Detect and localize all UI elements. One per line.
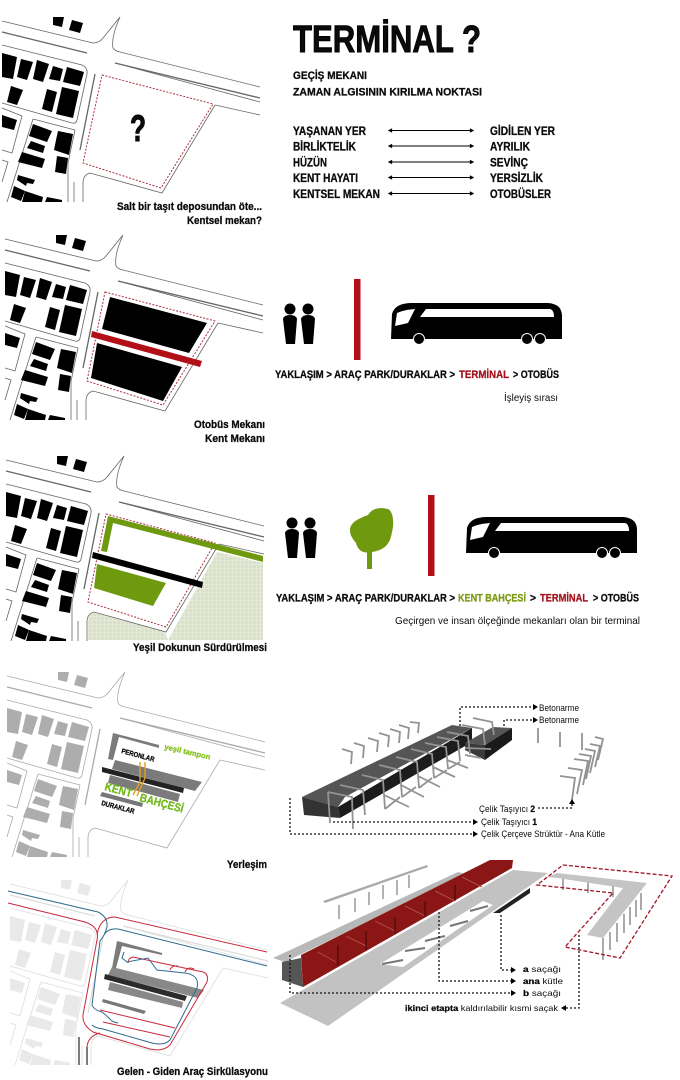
labels: ikinci etapta kaldırılabilir kısmi saçak <box>405 1003 559 1013</box>
labels: Betonarme <box>539 715 579 725</box>
labels <box>405 964 563 1013</box>
building blocks <box>10 880 92 1065</box>
caption: yeşil dokunun: Yeşil Dokunun Sürdürülmesi <box>133 642 267 654</box>
panel: green texture plan <box>6 456 264 641</box>
black mass upper <box>102 297 207 353</box>
dark end wall <box>282 958 303 987</box>
building blocks <box>6 456 88 641</box>
roads <box>6 456 264 641</box>
rear canopy <box>323 865 428 919</box>
platform L shape <box>112 941 162 968</box>
label: duraklar: DURAKLAR <box>100 800 135 816</box>
icon: tree <box>350 508 393 569</box>
caption: yerleşim: Yerleşim <box>227 859 267 871</box>
opposites list <box>293 125 556 201</box>
icon: two people <box>285 518 317 558</box>
left column: YAŞANAN YER <box>293 126 367 138</box>
roads <box>7 672 265 857</box>
right column: SEVİNÇ <box>490 156 528 170</box>
concrete block <box>465 727 512 760</box>
steel portal frames <box>328 718 494 829</box>
terminal band <box>112 760 202 791</box>
leader lines <box>290 912 579 1008</box>
note: geçirgen: Geçirgen ve insan ölçeğinde mekanları olan bir terminal <box>395 615 640 627</box>
title: TERMİNAL ? <box>293 19 481 61</box>
subtitle <box>293 69 482 98</box>
note: işleyiş sırası: İşleyiş sırası <box>504 391 558 404</box>
label: yeşil tampon: yeşil tampon <box>164 742 212 762</box>
building blocks <box>2 17 84 202</box>
left column: BİRLİKTELİK <box>293 140 357 154</box>
icon: bus <box>466 517 637 558</box>
main roof strip <box>273 872 466 962</box>
labels: a saçağı <box>523 964 561 974</box>
second band <box>108 982 183 1008</box>
question mark: ? <box>130 108 146 149</box>
building blocks <box>5 235 87 420</box>
building blocks <box>7 672 89 857</box>
left column <box>293 126 380 201</box>
green texture field <box>88 552 263 640</box>
label: peronlar: PERONLAR <box>120 748 155 764</box>
right column <box>490 125 556 201</box>
label: kent: KENT <box>103 781 133 800</box>
site boundary <box>83 75 213 188</box>
caption: salt bir taşıt <box>117 201 262 227</box>
labels: b saçağı <box>523 988 561 998</box>
sequence text <box>275 368 559 381</box>
sequence text <box>276 592 639 604</box>
labels: Betonarme <box>539 703 579 713</box>
subtitle: GEÇİŞ MEKANI <box>293 69 367 82</box>
bus stops strip <box>102 999 146 1014</box>
sequence text: > OTOBÜS <box>593 592 639 604</box>
main mass end face <box>302 797 340 818</box>
second band <box>108 775 180 802</box>
main mass top face <box>302 725 472 807</box>
labels: Çelik Taşıyıcı 1 <box>481 817 537 827</box>
sequence text: YAKLAŞIM > ARAÇ PARK/DURAKLAR > <box>275 369 455 381</box>
site boundary <box>88 514 215 627</box>
terminal band <box>108 967 204 998</box>
removable U canopy <box>547 873 647 960</box>
arrowheads <box>511 967 566 1011</box>
left column: HÜZÜN <box>293 156 327 170</box>
red terminal divider <box>354 279 360 360</box>
platform L shape <box>108 733 159 760</box>
dark road edges <box>79 1037 87 1065</box>
labels: Çelik Taşıyıcı 2 <box>479 804 535 814</box>
arrows <box>388 128 474 196</box>
labels: ana kütle <box>523 976 563 986</box>
left column: KENTSEL MEKAN <box>293 189 380 201</box>
caption: otobüs mekanı <box>194 419 265 445</box>
green buffer strip <box>101 516 263 562</box>
sequence text: KENT BAHÇESİ <box>458 592 526 604</box>
orange walkways <box>133 762 145 796</box>
labels: Çelik Çerçeve Strüktür - Ana Kütle <box>481 829 605 839</box>
caption: otobüs mekanı: Kent Mekanı <box>205 433 265 445</box>
sequence text: > <box>530 592 536 604</box>
black mass lower <box>91 343 182 401</box>
bus stops strip <box>100 792 143 807</box>
panel: site plan with question mark <box>2 17 260 202</box>
sequence text: YAKLAŞIM > ARAÇ PARK/DURAKLAR > <box>276 592 455 604</box>
arrowheads <box>473 704 575 837</box>
main mass side face <box>338 728 472 818</box>
icon: bus <box>391 303 562 344</box>
roads <box>2 17 260 202</box>
panel: circulation plan <box>8 880 268 1065</box>
rear bare frames <box>342 722 419 764</box>
roads <box>10 880 268 1065</box>
panel: bus and city space plan <box>5 235 263 420</box>
red terminal divider <box>428 495 434 576</box>
front slab <box>280 870 548 1026</box>
right column: YERSİZLİK <box>490 172 544 185</box>
dark underside <box>493 888 530 913</box>
icon: two people <box>283 304 315 344</box>
red terminal bar <box>91 331 202 367</box>
leader lines <box>290 707 572 834</box>
black bar <box>104 974 187 1001</box>
roads <box>5 235 263 420</box>
sequence text: > OTOBÜS <box>513 368 559 381</box>
labels <box>479 703 605 839</box>
panel: placement plan <box>7 672 265 857</box>
sequence text: TERMİNAL <box>459 368 509 381</box>
right isolated frames <box>538 728 603 800</box>
red route <box>8 903 267 1050</box>
caption: salt bir taşıt: Kentsel mekan? <box>187 215 262 227</box>
structure callouts <box>290 703 605 839</box>
left column: KENT HAYATI <box>293 173 358 185</box>
site boundary <box>87 292 215 405</box>
panel: terminal axonometric <box>273 860 672 1026</box>
caption: otobüs mekanı: Otobüs Mekanı <box>194 419 265 431</box>
panel: structure axonometric <box>302 718 603 829</box>
caption: gelen giden: Gelen - Giden Araç Sirkülasyonu <box>117 1066 268 1078</box>
red glazed wall <box>301 860 513 987</box>
caption: salt bir taşıt: Salt bir taşıt deposundan öte... <box>117 201 262 213</box>
subtitle: ZAMAN ALGISININ KIRILMA NOKTASI <box>293 86 482 98</box>
right column: OTOBÜSLER <box>490 188 552 201</box>
right column: AYRILIK <box>490 142 531 154</box>
black terminal bar <box>92 552 203 588</box>
red dashed phase outline <box>537 865 672 958</box>
blue route <box>8 891 267 1044</box>
terminal callouts <box>290 912 579 1013</box>
right column: GİDİLEN YER <box>490 125 556 138</box>
green garden <box>94 564 166 606</box>
courtyard openings <box>380 901 493 967</box>
black bar <box>102 767 184 793</box>
sequence text: TERMİNAL <box>540 592 588 604</box>
label: bahçesi: BAHÇESİ <box>138 791 185 816</box>
